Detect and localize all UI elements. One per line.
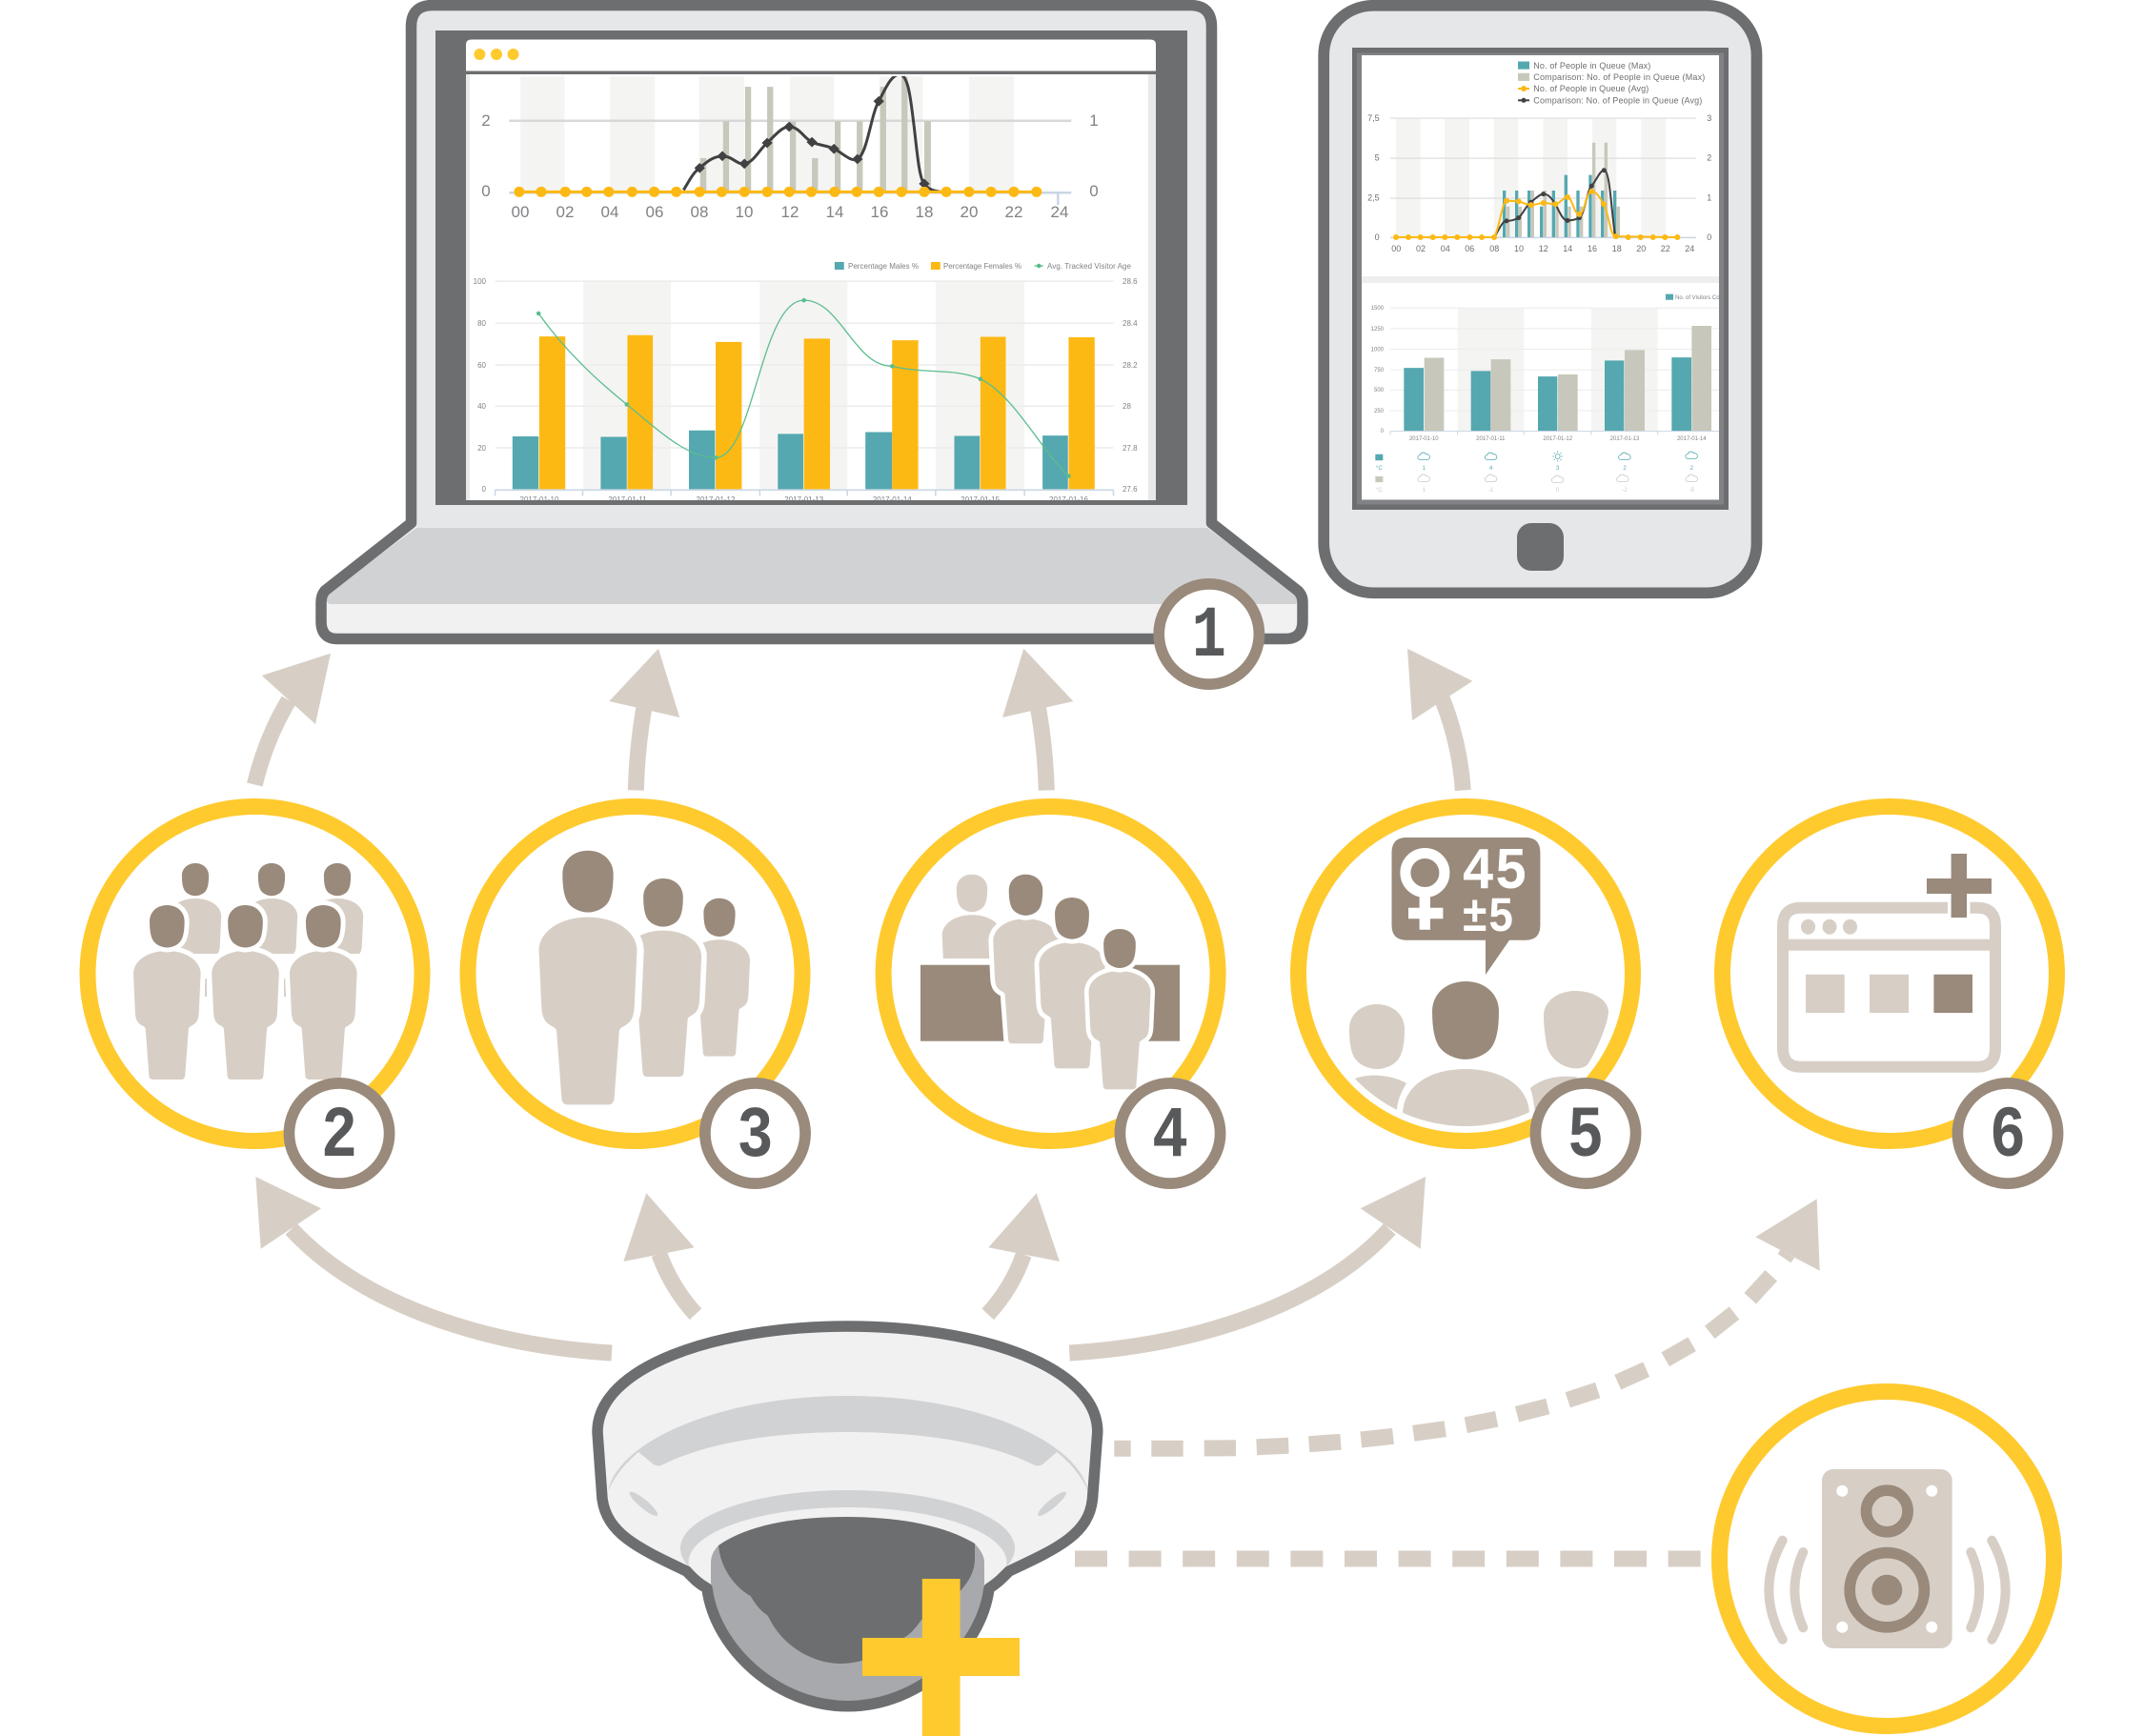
queue chart on tablet: Comparison: No. of People in Queue (Max) xyxy=(1533,72,1705,82)
visitor count chart on tablet: No. of Visitors Counted xyxy=(1675,295,1734,301)
lens dark interior xyxy=(718,1517,975,1664)
hourly queue chart on laptop: 14 xyxy=(826,203,843,221)
people of three sizes xyxy=(539,851,750,1104)
hourly queue chart on laptop xyxy=(481,74,1099,221)
laptop with analytics dashboard xyxy=(321,6,1303,638)
circle 2: people counting xyxy=(88,806,422,1141)
dome camera xyxy=(597,1326,1098,1706)
visitor gender and age chart on laptop: 2017-01-14 xyxy=(873,495,912,504)
visitor gender and age chart on laptop: 28 xyxy=(1123,402,1131,411)
visitor gender and age chart on laptop: 2017-01-15 xyxy=(961,495,1001,504)
visitor gender and age chart on laptop: 27.8 xyxy=(1123,444,1138,453)
queue chart on tablet: 16 xyxy=(1588,244,1597,253)
camera housing xyxy=(597,1326,1098,1706)
queue chart on tablet: 12 xyxy=(1539,244,1548,253)
arrow: circle 4 to laptop xyxy=(1002,649,1073,791)
visitor gender and age chart on laptop: 60 xyxy=(477,361,487,370)
visitor gender and age chart on laptop: 2017-01-10 xyxy=(520,495,559,504)
hourly queue chart on laptop: 20 xyxy=(961,203,978,221)
visitor gender and age chart on laptop: 80 xyxy=(477,319,487,328)
weather row on tablet: 1 xyxy=(1423,466,1426,472)
circle 3: adults and children xyxy=(468,806,802,1141)
weather row on tablet: -1 xyxy=(1488,488,1494,494)
hourly queue chart on laptop: 00 xyxy=(512,203,529,221)
hourly queue chart on laptop: 06 xyxy=(646,203,663,221)
visitor gender and age chart on laptop: 28.2 xyxy=(1123,361,1138,370)
weather row on tablet: -5 xyxy=(1689,488,1695,494)
hourly queue chart on laptop: 18 xyxy=(916,203,933,221)
visitor gender and age chart on laptop: Percentage Males % xyxy=(848,262,919,271)
queue chart on tablet: 04 xyxy=(1441,244,1450,253)
visitor count chart on tablet: 2017-01-11 xyxy=(1476,436,1506,442)
dashed arrow: camera to circle 6 xyxy=(1114,1199,1820,1448)
screw recesses xyxy=(627,1489,1068,1519)
visitor gender and age chart on laptop xyxy=(474,262,1138,504)
weather row on tablet xyxy=(1376,452,1697,494)
visitor count chart on tablet: 250 xyxy=(1374,409,1385,414)
queue chart on tablet: 18 xyxy=(1612,244,1622,253)
visitor count chart on tablet: 1000 xyxy=(1371,347,1385,353)
queue chart on tablet: 00 xyxy=(1391,244,1401,253)
speaker icon xyxy=(1822,1469,1952,1648)
queue chart on tablet: 1 xyxy=(1707,193,1711,203)
queue chart on tablet: 20 xyxy=(1636,244,1646,253)
circle 4: queue at a counter xyxy=(883,806,1218,1141)
circle: speaker xyxy=(1719,1391,2054,1726)
arrow: camera to circle 4 xyxy=(988,1193,1060,1314)
queue chart on tablet: No. of People in Queue (Avg) xyxy=(1533,84,1648,93)
lens dome xyxy=(711,1544,984,1701)
housing shadow band xyxy=(608,1396,1088,1491)
panel divider on tablet xyxy=(1362,276,1719,283)
visitor gender and age chart on laptop: 100 xyxy=(474,277,487,286)
visitor gender and age chart on laptop: 2017-01-11 xyxy=(608,495,647,504)
badge 4 xyxy=(1120,1083,1221,1183)
hourly queue chart on laptop: 22 xyxy=(1005,203,1022,221)
queue chart on tablet: 2,5 xyxy=(1367,193,1380,203)
hourly queue chart on laptop: 0 xyxy=(481,182,491,200)
visitor count chart on tablet: 2017-01-14 xyxy=(1677,436,1707,442)
visitor gender and age chart on laptop: 2017-01-13 xyxy=(784,495,824,504)
badge 1: 1 xyxy=(1192,595,1226,677)
circle 5: demographics xyxy=(1298,806,1633,1141)
visitor count chart on tablet: 750 xyxy=(1374,368,1385,373)
badge 2 xyxy=(289,1083,390,1183)
queue chart on tablet: 08 xyxy=(1489,244,1499,253)
browser header rule xyxy=(466,71,1156,74)
visitor count chart on tablet: 500 xyxy=(1374,388,1385,394)
badge 1 xyxy=(1159,584,1259,684)
sound waves xyxy=(1769,1541,2006,1640)
visitor gender and age chart on laptop: 0 xyxy=(482,485,487,494)
weather row on tablet: 4 xyxy=(1489,466,1493,472)
queue chart on tablet: 02 xyxy=(1416,244,1426,253)
arrow: circle 5 to tablet xyxy=(1407,649,1472,791)
badge 2: 2 xyxy=(321,1096,357,1178)
queue chart on tablet: Comparison: No. of People in Queue (Avg) xyxy=(1533,95,1702,105)
laptop body xyxy=(321,6,1303,638)
arrow: camera to circle 5 xyxy=(1069,1177,1426,1353)
female symbol xyxy=(1406,854,1445,930)
hourly queue chart on laptop: 12 xyxy=(781,203,799,221)
hourly queue chart on laptop: 2 xyxy=(481,111,491,130)
circle 6: add-on application xyxy=(1723,806,2056,1141)
visitor count chart on tablet: 2017-01-10 xyxy=(1409,436,1439,442)
weather row on tablet: 0 xyxy=(1556,488,1560,494)
queue chart on tablet: 24 xyxy=(1685,244,1694,253)
queue chart on tablet: 0 xyxy=(1375,232,1380,242)
queue chart on tablet: 5 xyxy=(1375,153,1380,163)
badge 3 xyxy=(705,1083,805,1183)
badge 6: 6 xyxy=(1990,1096,2026,1178)
queue chart on tablet: 22 xyxy=(1661,244,1670,253)
weather row on tablet: 1 xyxy=(1423,488,1426,494)
camera outline xyxy=(597,1326,1098,1706)
queue of people xyxy=(993,875,1150,1089)
back row people xyxy=(177,863,364,954)
hourly queue chart on laptop: 02 xyxy=(556,203,574,221)
front row people xyxy=(133,905,357,1080)
tablet body xyxy=(1324,6,1757,593)
visitor gender and age chart on laptop: 28.6 xyxy=(1123,277,1138,286)
speech bubble with age and gender xyxy=(1391,838,1540,975)
browser window xyxy=(466,40,1156,500)
badge 4: 4 xyxy=(1152,1096,1188,1178)
speech bubble with age and gender: ±5 xyxy=(1462,890,1514,946)
visitor gender and age chart on laptop: 2017-01-12 xyxy=(697,495,736,504)
badge 6 xyxy=(1957,1083,2058,1183)
visitor count chart on tablet xyxy=(1371,294,1734,494)
hourly queue chart on laptop: 10 xyxy=(736,203,753,221)
visitor count chart on tablet: 1500 xyxy=(1371,306,1385,312)
badge 5: 5 xyxy=(1568,1096,1604,1178)
hourly queue chart on laptop: 1 xyxy=(1089,111,1099,130)
visitor gender and age chart on laptop: 27.6 xyxy=(1123,485,1138,494)
arrow: camera to circle 3 xyxy=(623,1193,696,1314)
visitor gender and age chart on laptop: 20 xyxy=(477,444,487,453)
hourly queue chart on laptop: 16 xyxy=(871,203,888,221)
plus icon xyxy=(1927,854,1992,918)
queue chart on tablet: No. of People in Queue (Max) xyxy=(1533,61,1650,71)
weather row on tablet: -2 xyxy=(1622,488,1628,494)
visitor count chart on tablet: 2017-01-13 xyxy=(1610,436,1640,442)
counter xyxy=(920,965,1180,1041)
badge 3: 3 xyxy=(738,1096,774,1178)
waiting person behind counter xyxy=(941,875,997,959)
weather row on tablet: 2 xyxy=(1623,466,1627,472)
dashed line: camera to speaker xyxy=(1075,1551,1701,1566)
queue chart on tablet xyxy=(1367,61,1711,253)
visitor count chart on tablet: 1250 xyxy=(1371,327,1385,333)
three people silhouettes xyxy=(1349,981,1608,1126)
arrow: circle 3 to laptop xyxy=(609,649,679,791)
visitor gender and age chart on laptop: 2017-01-16 xyxy=(1049,495,1089,504)
arrow: circle 2 to laptop xyxy=(254,654,331,785)
queue chart on tablet: 14 xyxy=(1563,244,1572,253)
lens ring xyxy=(680,1490,1015,1566)
arrow: camera to circle 2 xyxy=(255,1177,612,1353)
queue chart on tablet: 3 xyxy=(1707,113,1711,123)
queue chart on tablet: 0 xyxy=(1707,232,1711,242)
hourly queue chart on laptop: 04 xyxy=(601,203,618,221)
hourly queue chart on laptop: 0 xyxy=(1089,182,1099,200)
speech bubble with age and gender: 45 xyxy=(1462,838,1527,906)
weather row on tablet: 2 xyxy=(1690,466,1694,472)
hourly queue chart on laptop: 24 xyxy=(1051,203,1068,221)
queue chart on tablet: 2 xyxy=(1707,153,1711,163)
queue chart on tablet: 10 xyxy=(1514,244,1524,253)
visitor count chart on tablet: 0 xyxy=(1381,429,1385,434)
weather row on tablet: °C xyxy=(1376,488,1383,494)
visitor count chart on tablet: 2017-01-12 xyxy=(1543,436,1573,442)
visitor gender and age chart on laptop: 40 xyxy=(477,402,487,411)
weather row on tablet: °C xyxy=(1376,466,1383,472)
queue chart on tablet: 06 xyxy=(1465,244,1474,253)
hourly queue chart on laptop: 08 xyxy=(691,203,708,221)
weather row on tablet: 3 xyxy=(1556,466,1560,472)
yellow plus on camera xyxy=(862,1579,1020,1736)
browser window icon xyxy=(1783,908,1995,1067)
tablet with analytics dashboard xyxy=(1324,6,1757,593)
queue chart on tablet: 7,5 xyxy=(1367,113,1380,123)
visitor gender and age chart on laptop: Percentage Females % xyxy=(943,262,1021,271)
visitor gender and age chart on laptop: Avg. Tracked Visitor Age xyxy=(1047,262,1132,271)
visitor gender and age chart on laptop: 28.4 xyxy=(1123,319,1138,328)
badge 5 xyxy=(1535,1083,1636,1183)
